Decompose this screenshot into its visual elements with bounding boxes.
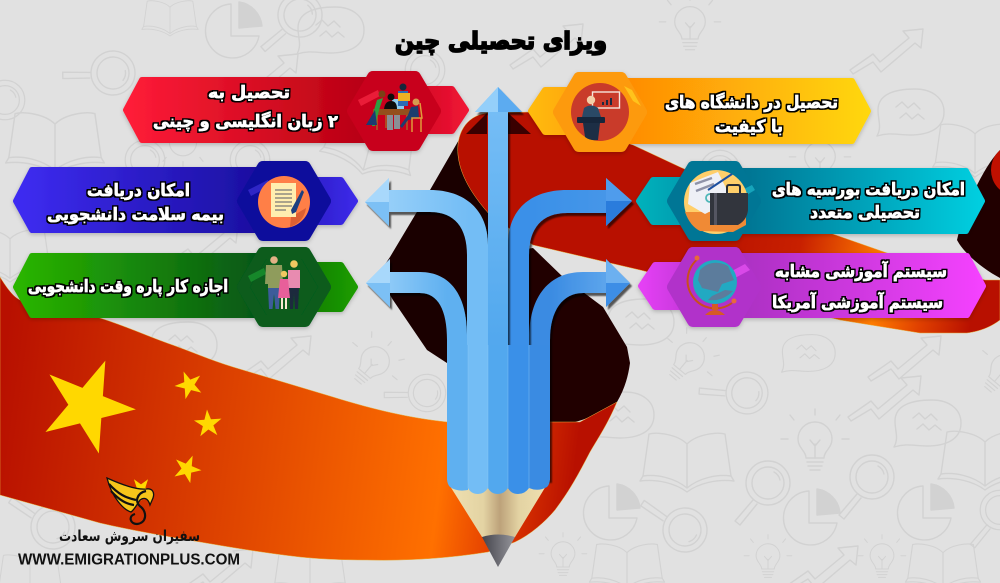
text: two languages [153,83,339,132]
text: quality universities: تحصیل در دانشگاه های [665,92,838,113]
text: scholarships: تحصیلی متعدد [810,203,920,223]
far-right red ribbon cap [991,146,1000,194]
text: quality universities [665,92,838,137]
far-right dark ribbon fold [957,150,1000,278]
card: scholarships [639,167,982,235]
icon: briefcase and documents [684,170,748,234]
logo: S mark [109,484,146,524]
flag stars [29,343,223,504]
card: quality universities [531,78,868,146]
icon: globe [688,256,737,315]
card: part-time work [16,253,355,321]
upper red ribbon band [458,112,1000,333]
arrow: lower right [529,259,630,480]
pencil lead [482,534,515,567]
pencil body scallops [447,345,550,494]
card: health insurance [16,167,355,235]
lower red and orange ribbon band [0,277,617,560]
title: ویزای تحصیلی چین [395,27,607,55]
text: US-like education system [772,260,947,313]
text: scholarships [772,180,965,223]
left dark ribbon fold [378,130,500,365]
icon: document and pen [258,176,310,228]
text: health insurance: امکان دریافت [87,181,190,201]
logo [18,478,240,568]
pencil with five arrows [365,87,632,567]
logo: website: WWW.EMIGRATIONPLUS.COM [18,552,240,568]
text: US-like education system: سیستم آموزشی آمریکا [772,291,943,313]
text: scholarships: امکان دریافت بورسیه های [772,180,965,200]
arrow: upper left [365,178,488,480]
icon: team at a table [366,84,422,132]
arrow shadows on ribbon [466,113,531,134]
card: US-like education system [641,253,983,321]
arrow: upper right [508,178,632,480]
icon: lecturer at podium [571,83,629,141]
logo: wing [107,478,154,512]
icon: family [265,256,300,309]
arrow: centre up [475,87,522,480]
text: two languages: ۲ زبان انگلیسی و چینی [153,111,339,132]
card: two languages [126,77,466,145]
arrow: lower left [366,259,467,480]
text: health insurance [47,181,224,225]
pencil wood tip [450,486,546,537]
text: quality universities: با کیفیت [715,117,783,137]
text: two languages: تحصیل به [208,83,290,103]
right dark ribbon fold [520,248,630,428]
text: US-like education system: سیستم آموزشی مشابه [775,260,947,282]
text: part-time work: اجازه کار پاره وقت دانشجویی [28,277,228,297]
text: health insurance: بیمه سلامت دانشجویی [47,205,224,225]
logo: company name: سفیران سروش سعادت [59,527,200,545]
